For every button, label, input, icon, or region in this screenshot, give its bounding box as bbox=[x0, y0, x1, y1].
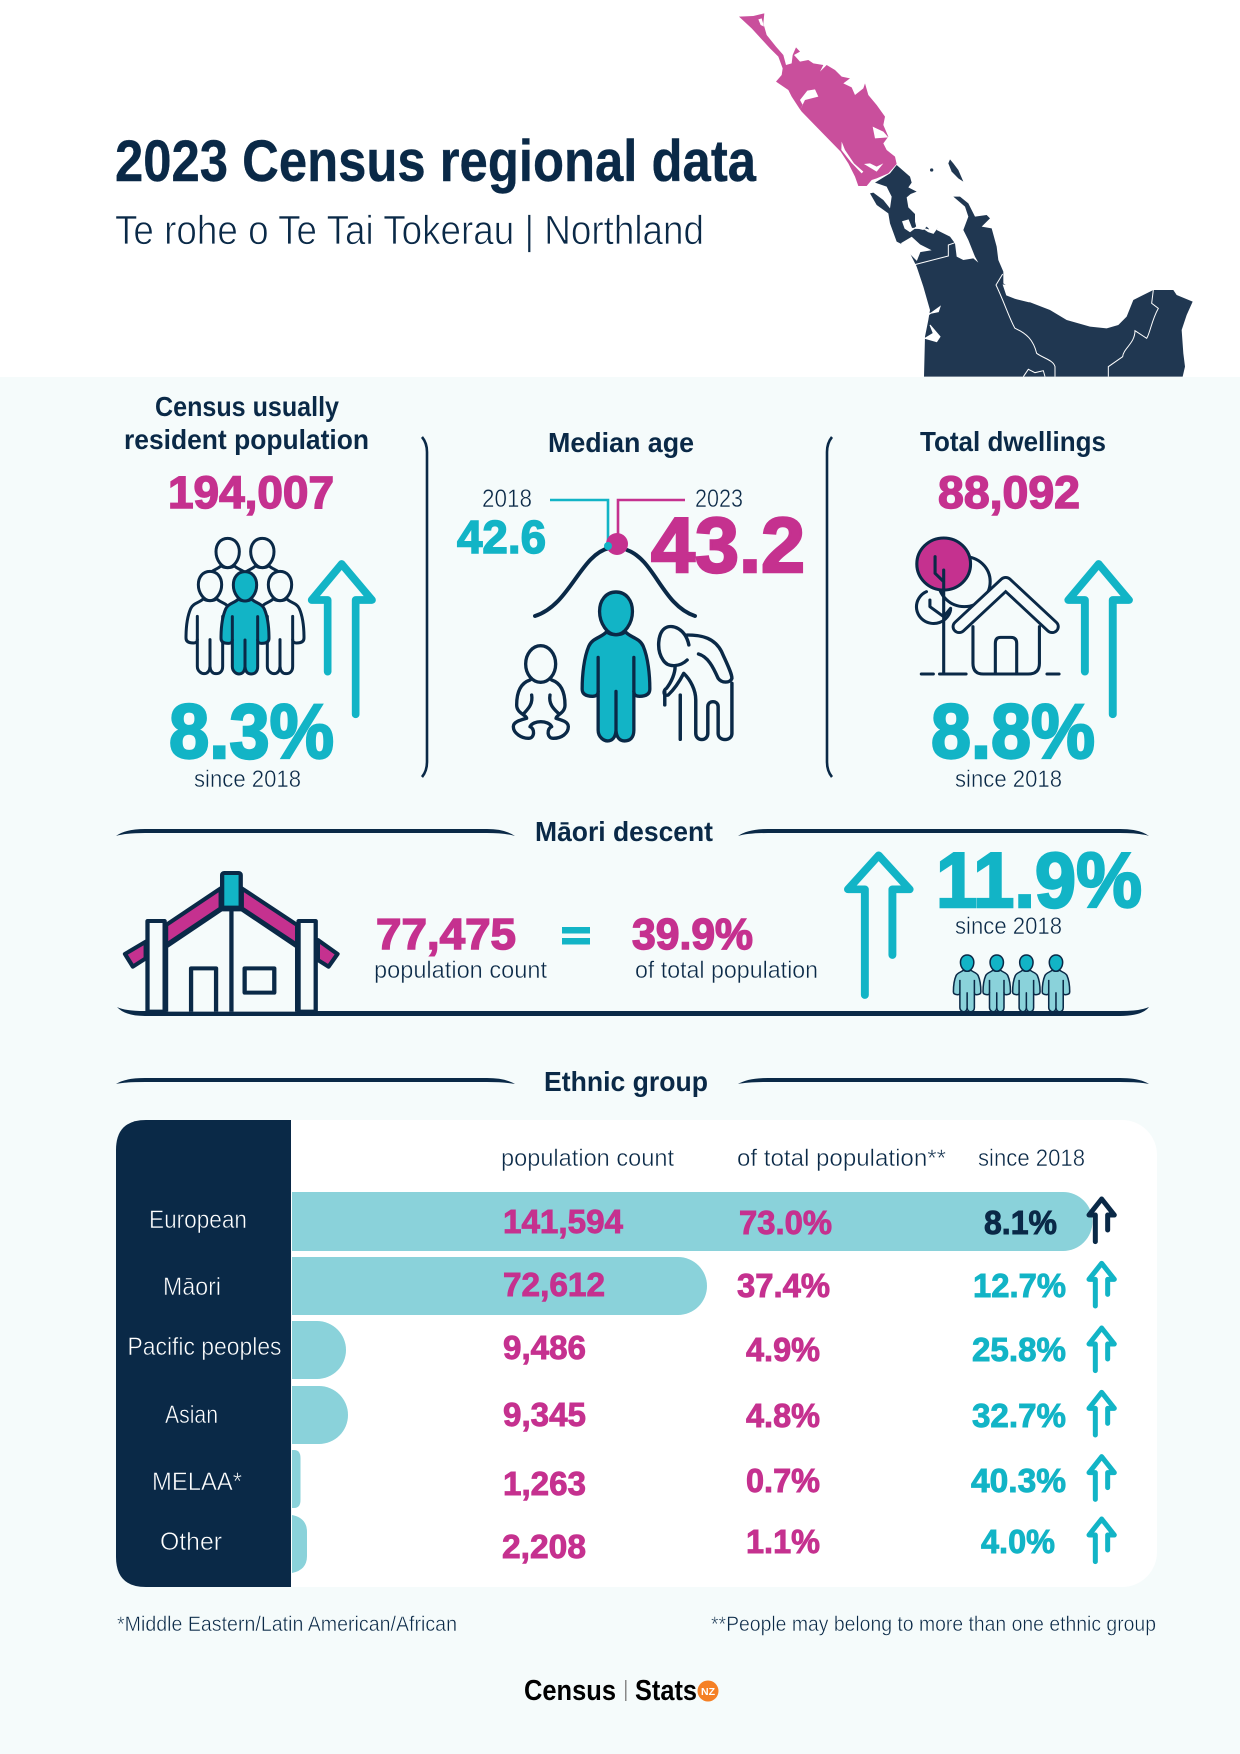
panel divider left bbox=[422, 437, 427, 777]
since 2018 label: since 2018 bbox=[955, 766, 1062, 793]
map: Northland harbour cuts bbox=[758, 18, 888, 173]
row labels: Māori bbox=[163, 1273, 221, 1301]
row labels: European bbox=[149, 1206, 247, 1234]
change since 2018 values: 8.1% bbox=[984, 1204, 1057, 1241]
panel divider right bbox=[827, 437, 832, 777]
share of total population values: 4.9% bbox=[746, 1331, 820, 1368]
population count values: 141,594 bbox=[503, 1203, 624, 1240]
icon: four people bbox=[953, 955, 1070, 1012]
row labels: Pacific peoples bbox=[128, 1333, 282, 1361]
share of total population values: 0.7% bbox=[746, 1462, 820, 1499]
arrow: population up bbox=[312, 564, 372, 714]
population count values: 2,208 bbox=[502, 1528, 586, 1565]
share of total population values: 37.4% bbox=[737, 1267, 830, 1304]
column headers: of total population** bbox=[737, 1145, 946, 1172]
heading: median age: Median age bbox=[548, 427, 694, 458]
heading: ethnic group: Ethnic group bbox=[544, 1066, 708, 1097]
panel: Māori descent bbox=[116, 816, 1149, 1016]
arrow: dwellings up bbox=[1068, 564, 1129, 714]
panel: median age bbox=[457, 427, 805, 741]
icon: group of people bbox=[186, 538, 304, 674]
title: 2023 Census regional data bbox=[115, 129, 757, 194]
icon: adult bbox=[582, 592, 650, 741]
subtitle: Te rohe o Te Tai Tokerau | Northland bbox=[115, 207, 704, 253]
heading lines bbox=[116, 1078, 1149, 1084]
icon: elderly person with cane bbox=[659, 626, 732, 740]
since 2018 label: since 2018 bbox=[955, 913, 1062, 940]
header white band bbox=[0, 0, 1240, 377]
row labels bbox=[128, 1206, 282, 1556]
share of total population: of total population bbox=[635, 957, 818, 984]
population count values bbox=[502, 1203, 624, 1565]
share of total population values: 73.0% bbox=[739, 1204, 832, 1241]
icon: house and trees bbox=[916, 538, 1059, 674]
icon: baby bbox=[513, 646, 568, 738]
Māori population count: population count bbox=[374, 957, 547, 984]
arrow: Māori descent up bbox=[848, 855, 910, 995]
map: rest of North Island bbox=[870, 165, 1193, 377]
map: Northland region bbox=[739, 13, 897, 186]
column headers: population count bbox=[501, 1145, 674, 1172]
Māori population count: 77,475 bbox=[376, 910, 516, 959]
population count values: 9,345 bbox=[503, 1396, 586, 1433]
population count values: 72,612 bbox=[503, 1266, 605, 1303]
dwellings number: 88,092 bbox=[938, 467, 1080, 518]
label 2018: 2018 bbox=[482, 485, 532, 513]
dwellings change: 8.8% bbox=[931, 689, 1095, 775]
heading: total dwellings: Total dwellings bbox=[920, 426, 1106, 457]
footnote: MELAA definition: *Middle Eastern/Latin American/African bbox=[117, 1613, 457, 1636]
population count values: 9,486 bbox=[503, 1329, 586, 1366]
change since 2018 values: 40.3% bbox=[971, 1462, 1066, 1499]
table card bbox=[116, 1120, 1157, 1587]
share of total population values: 4.8% bbox=[746, 1397, 820, 1434]
heading: census usually resident population bbox=[124, 391, 369, 455]
map: upper North Island with Northland highlighted bbox=[739, 13, 1193, 377]
population number: 194,007 bbox=[168, 467, 334, 518]
map: small island bbox=[930, 168, 933, 172]
logo: Census and Stats NZ: Census bbox=[524, 1675, 616, 1707]
change since 2018 values: 32.7% bbox=[972, 1397, 1066, 1434]
row labels: Other bbox=[160, 1528, 222, 1556]
panel: ethnic group bbox=[116, 1066, 1157, 1587]
change since 2018 values: 25.8% bbox=[972, 1331, 1066, 1368]
panel: total dwellings bbox=[916, 426, 1129, 793]
heading: Māori descent: Māori descent bbox=[535, 816, 713, 847]
logo: Census and Stats NZ bbox=[524, 1675, 718, 1707]
icon: wharenui meeting house bbox=[125, 873, 337, 1012]
frame lines bbox=[116, 829, 1149, 1016]
population change: 8.3% bbox=[169, 689, 334, 775]
footnote: multiple ethnic groups: **People may belong to more than one ethnic group bbox=[711, 1613, 1156, 1636]
column headers: since 2018 bbox=[978, 1145, 1085, 1172]
equals sign bbox=[562, 927, 590, 944]
row labels: Asian bbox=[165, 1401, 218, 1429]
heading: census usually resident population: Census usually bbox=[155, 391, 339, 422]
panel: census usually resident population bbox=[124, 391, 372, 793]
change since 2018 values bbox=[971, 1204, 1066, 1560]
logo: Census and Stats NZ: Stats bbox=[635, 1675, 697, 1707]
value 42.6: 42.6 bbox=[457, 511, 546, 563]
logo: Census and Stats NZ: NZ bbox=[701, 1686, 716, 1698]
Māori population count bbox=[374, 910, 547, 984]
value 43.2: 43.2 bbox=[651, 501, 805, 589]
label column bbox=[116, 1120, 291, 1587]
bar chart: population by ethnic group bbox=[292, 1192, 1092, 1573]
heading: census usually resident population: resident population bbox=[124, 424, 369, 455]
Māori descent change: 11.9% bbox=[936, 836, 1142, 924]
map: white coastline cuts and region boundaries bbox=[902, 220, 1158, 377]
share of total population: 39.9% bbox=[632, 910, 753, 959]
row labels: MELAA* bbox=[152, 1468, 242, 1496]
label 2023: 2023 bbox=[695, 485, 743, 513]
share of total population values: 1.1% bbox=[746, 1523, 820, 1560]
share of total population values bbox=[737, 1204, 832, 1560]
population count values: 1,263 bbox=[503, 1465, 586, 1502]
map: Great Barrier island bbox=[948, 159, 963, 182]
change since 2018 values: 12.7% bbox=[973, 1267, 1066, 1304]
since 2018 label: since 2018 bbox=[194, 766, 301, 793]
column headers bbox=[501, 1145, 1085, 1172]
age curve with markers bbox=[535, 500, 695, 616]
share of total population bbox=[632, 910, 818, 984]
change since 2018 values: 4.0% bbox=[981, 1523, 1055, 1560]
arrows: change since 2018 bbox=[1089, 1199, 1114, 1562]
